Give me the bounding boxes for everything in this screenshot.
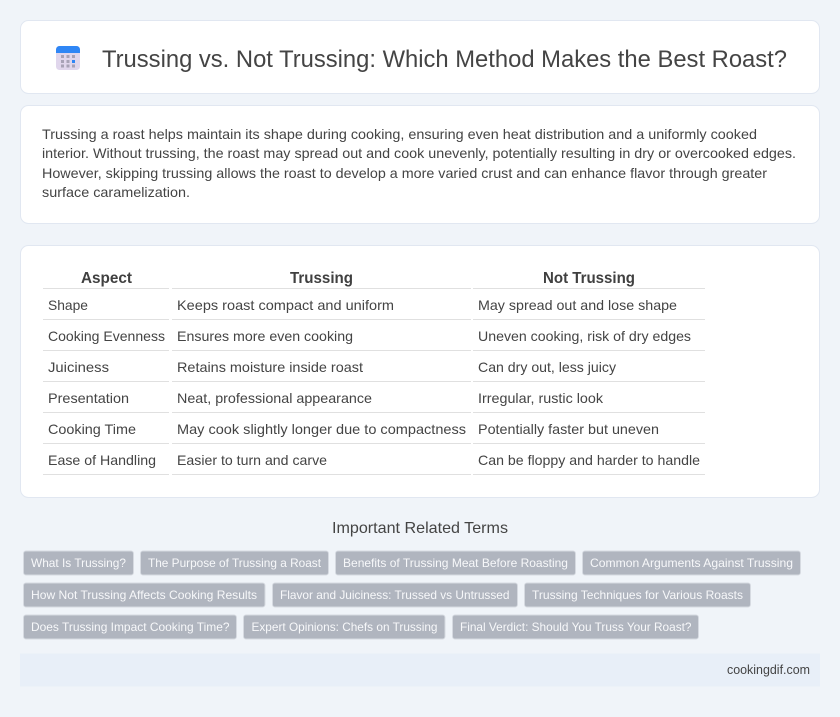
tag — [272, 583, 518, 607]
table row: ease of handling: Ease of Handling — [48, 452, 156, 468]
table row: ease of handling: Can be floppy and harder to handle — [478, 452, 700, 468]
tag — [452, 615, 698, 639]
tag — [24, 615, 236, 639]
table row: juiciness — [43, 359, 705, 382]
tag list: related terms — [24, 551, 800, 639]
tag: What Is Trussing? — [31, 556, 126, 570]
tag — [582, 551, 800, 575]
tag — [24, 551, 134, 575]
panel: comparison table — [20, 246, 820, 498]
tag: The Purpose of Trussing a Roast — [148, 556, 322, 570]
table row: juiciness: Juiciness — [48, 359, 109, 375]
table row: cooking evenness: Ensures more even cooking — [177, 328, 353, 344]
table row: presentation: Presentation — [48, 390, 129, 406]
table row: presentation — [43, 390, 705, 412]
table row: cooking time — [43, 421, 705, 444]
table header row: Not Trussing — [543, 270, 635, 287]
table row: shape: Keeps roast compact and uniform — [177, 297, 394, 313]
tag: Final Verdict: Should You Truss Your Roast? — [460, 620, 692, 634]
table row: presentation: Neat, professional appearance — [177, 390, 372, 406]
table row: cooking time: May cook slightly longer due to compactness — [177, 421, 466, 437]
table row: cooking time: Cooking Time — [48, 421, 136, 437]
text block: introduction: However, skipping trussing allows the roast to develop a more varied crust and can enhance flavor through greater — [42, 165, 767, 181]
table header row: Aspect — [81, 270, 133, 287]
footer — [20, 654, 820, 686]
table row: cooking evenness: Cooking Evenness — [48, 328, 165, 344]
tag: Expert Opinions: Chefs on Trussing — [252, 620, 438, 634]
icon: calendar — [56, 46, 80, 70]
table row: juiciness: Retains moisture inside roast — [177, 359, 363, 375]
panel: title header — [20, 20, 820, 94]
tag — [524, 583, 750, 607]
tag — [336, 551, 576, 575]
tag: Common Arguments Against Trussing — [590, 556, 793, 570]
table header row: Trussing — [290, 270, 353, 287]
table row: cooking time: Potentially faster but uneven — [478, 421, 659, 437]
tag: Flavor and Juiciness: Trussed vs Untrussed — [280, 588, 510, 602]
table row: presentation: Irregular, rustic look — [478, 390, 604, 406]
tag: How Not Trussing Affects Cooking Results — [31, 588, 257, 602]
table header row — [43, 270, 705, 288]
table row: ease of handling — [43, 452, 705, 474]
text block: introduction: Trussing a roast helps maintain its shape during cooking, ensuring even heat distribution and a uniformly cooked — [42, 126, 757, 142]
table row: shape — [43, 297, 705, 320]
table row: shape: May spread out and lose shape — [478, 297, 677, 313]
tag — [24, 583, 265, 607]
table row: shape: Shape — [48, 297, 88, 313]
table row: ease of handling: Easier to turn and carve — [177, 452, 327, 468]
tag: Trussing Techniques for Various Roasts — [532, 588, 743, 602]
tag: Benefits of Trussing Meat Before Roasting — [343, 556, 568, 570]
text block: introduction — [42, 126, 796, 200]
table row: cooking evenness — [43, 328, 705, 350]
footer source text: cookingdif.com — [727, 662, 810, 677]
title: Trussing vs. Not Trussing: Which Method Makes the Best Roast? — [102, 46, 787, 73]
tag — [244, 615, 445, 639]
panel: introduction — [20, 106, 820, 224]
text block: introduction: surface caramelization. — [42, 184, 190, 200]
text block: introduction: interior. Without trussing, the roast may spread out and cook unevenly, potentially resulting in dry or overcooked edges. — [42, 145, 796, 161]
tag: Does Trussing Impact Cooking Time? — [31, 620, 230, 634]
heading: related terms: Important Related Terms — [332, 520, 508, 537]
table row: cooking evenness: Uneven cooking, risk of dry edges — [478, 328, 691, 344]
tag — [140, 551, 328, 575]
table row: juiciness: Can dry out, less juicy — [478, 359, 616, 375]
